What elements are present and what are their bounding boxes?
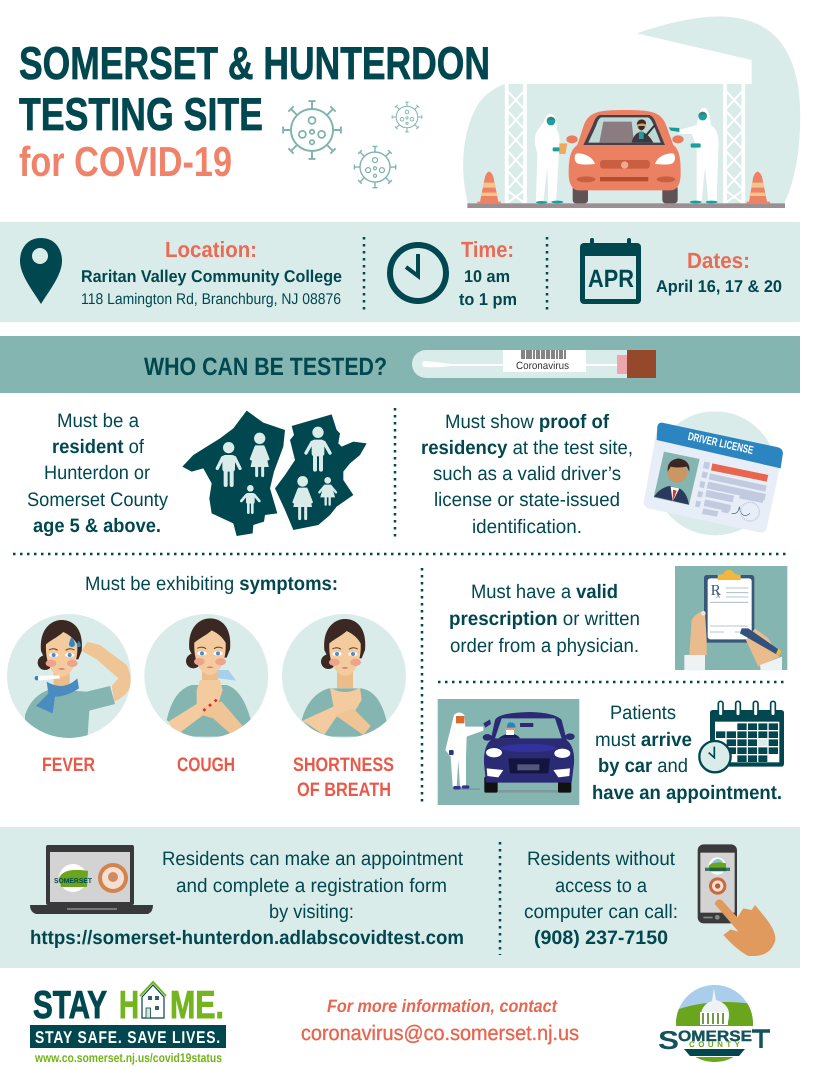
icon: clock <box>390 245 446 301</box>
text: residency requirement: age 5 & above. <box>33 515 161 537</box>
title: TESTING SITE <box>19 88 263 140</box>
logo: stay home <box>30 982 226 1065</box>
logo: somerset county <box>658 985 770 1063</box>
icon: prescription clipboard: R <box>711 581 721 598</box>
panel: how to register <box>0 827 800 968</box>
title <box>19 37 490 185</box>
text: proof of residency: license or state-issued <box>434 489 620 511</box>
logo: stay home: STAY SAFE. SAVE LIVES. <box>35 1028 221 1047</box>
logo: stay home: ME. <box>170 984 224 1027</box>
title: SOMERSET & HUNTERDON <box>19 37 490 89</box>
icon: prescription clipboard <box>675 566 787 670</box>
icon: phone and hand <box>698 844 775 956</box>
text: residency requirement: resident of <box>52 436 145 458</box>
registration text <box>30 848 464 949</box>
icon: laptop: SOMERSET <box>54 878 93 885</box>
heading: who can be tested: WHO CAN BE TESTED? <box>144 353 387 381</box>
icon: cough <box>144 614 268 738</box>
icon: test tube swab <box>412 350 656 378</box>
text: residency requirement <box>27 410 168 537</box>
illustration: patient in car <box>438 699 579 805</box>
phone call text <box>524 848 678 949</box>
phone call text: Residents without <box>527 848 676 870</box>
time text: Time: <box>461 237 514 262</box>
phone call text: (908) 237-7150 <box>534 927 668 949</box>
text: residency requirement: Hunterdon or <box>44 462 150 484</box>
contact information: coronavirus@co.somerset.nj.us <box>301 1022 579 1045</box>
icon: laptop <box>30 845 153 914</box>
time text: to 1 pm <box>459 290 517 309</box>
contact information <box>301 996 579 1045</box>
registration text: and complete a registration form <box>176 875 447 897</box>
phone call text: access to a <box>555 875 647 897</box>
dates text <box>656 248 782 296</box>
location text <box>81 237 342 308</box>
phone call text: computer can call: <box>524 901 678 923</box>
time text <box>459 237 517 309</box>
text: arrive by car: have an appointment. <box>592 782 782 804</box>
icon: shortness of breath <box>282 614 406 738</box>
symptom labels: FEVER <box>42 754 95 776</box>
icon: fever <box>7 614 131 740</box>
icon: test tube swab: Coronavirus <box>516 360 569 372</box>
text: proof of residency: such as a valid driver’s <box>433 463 621 485</box>
text: arrive by car: must arrive <box>595 729 692 751</box>
icon: map pin <box>20 238 62 304</box>
icon: driver license <box>644 411 783 535</box>
text: prescription <box>449 581 640 657</box>
panel: location, time and dates <box>0 222 800 322</box>
text: proof of residency: identification. <box>472 516 582 538</box>
text: proof of residency <box>421 411 633 538</box>
icon: prescription clipboard: x <box>716 590 720 599</box>
icon: calendar APR <box>580 238 641 304</box>
symptom labels: OF BREATH <box>297 779 391 801</box>
logo: stay home: STAY <box>33 984 107 1027</box>
text: prescription: order from a physician. <box>450 635 639 657</box>
registration text: https://somerset-hunterdon.adlabscovidtest.com <box>30 927 464 949</box>
symptom labels: COUGH <box>177 754 235 776</box>
icon: virus particles <box>283 101 422 188</box>
icon: calendar and clock <box>699 701 784 772</box>
contact information: For more information, contact <box>327 996 558 1016</box>
text: proof of residency: residency at the test site, <box>421 437 633 459</box>
logo: stay home: H <box>119 984 139 1027</box>
icon: calendar APR: APR <box>588 265 634 293</box>
logo: somerset county: S <box>658 1025 679 1055</box>
text: arrive by car <box>592 702 782 804</box>
registration text: Residents can make an appointment <box>162 848 464 870</box>
text: prescription: Must have a valid <box>471 581 618 603</box>
title: for COVID-19 <box>19 138 232 185</box>
logo: stay home: www.co.somerset.nj.us/covid19status <box>34 1051 222 1065</box>
location text: Raritan Valley Community College <box>81 267 342 286</box>
dates text: April 16, 17 & 20 <box>656 277 782 296</box>
registration text: by visiting: <box>269 901 354 923</box>
text: proof of residency: Must show proof of <box>445 411 609 433</box>
text: arrive by car: by car and <box>598 755 688 777</box>
dates text: Dates: <box>687 248 750 273</box>
text: residency requirement: Must be a <box>57 410 139 432</box>
location text: Location: <box>165 237 257 262</box>
text: prescription: prescription or written <box>449 608 640 630</box>
location text: 118 Lamington Rd, Branchburg, NJ 08876 <box>81 291 341 308</box>
symptom labels <box>42 754 394 801</box>
text: residency requirement: Somerset County <box>27 489 168 511</box>
heading: symptoms: Must be exhibiting symptoms: <box>85 573 338 595</box>
logo: somerset county: OMERSE <box>678 1028 752 1045</box>
icon: house <box>140 982 166 1018</box>
icon: county map with residents <box>182 411 367 536</box>
illustration: drive-through testing site <box>463 16 800 208</box>
time text: 10 am <box>464 267 510 286</box>
logo: somerset county: COUNTY <box>689 1040 741 1049</box>
heading: who can be tested <box>0 336 800 393</box>
text: arrive by car: Patients <box>610 702 676 724</box>
icon: driver license: DRIVER LICENSE <box>687 430 755 457</box>
symptom labels: SHORTNESS <box>293 754 394 776</box>
